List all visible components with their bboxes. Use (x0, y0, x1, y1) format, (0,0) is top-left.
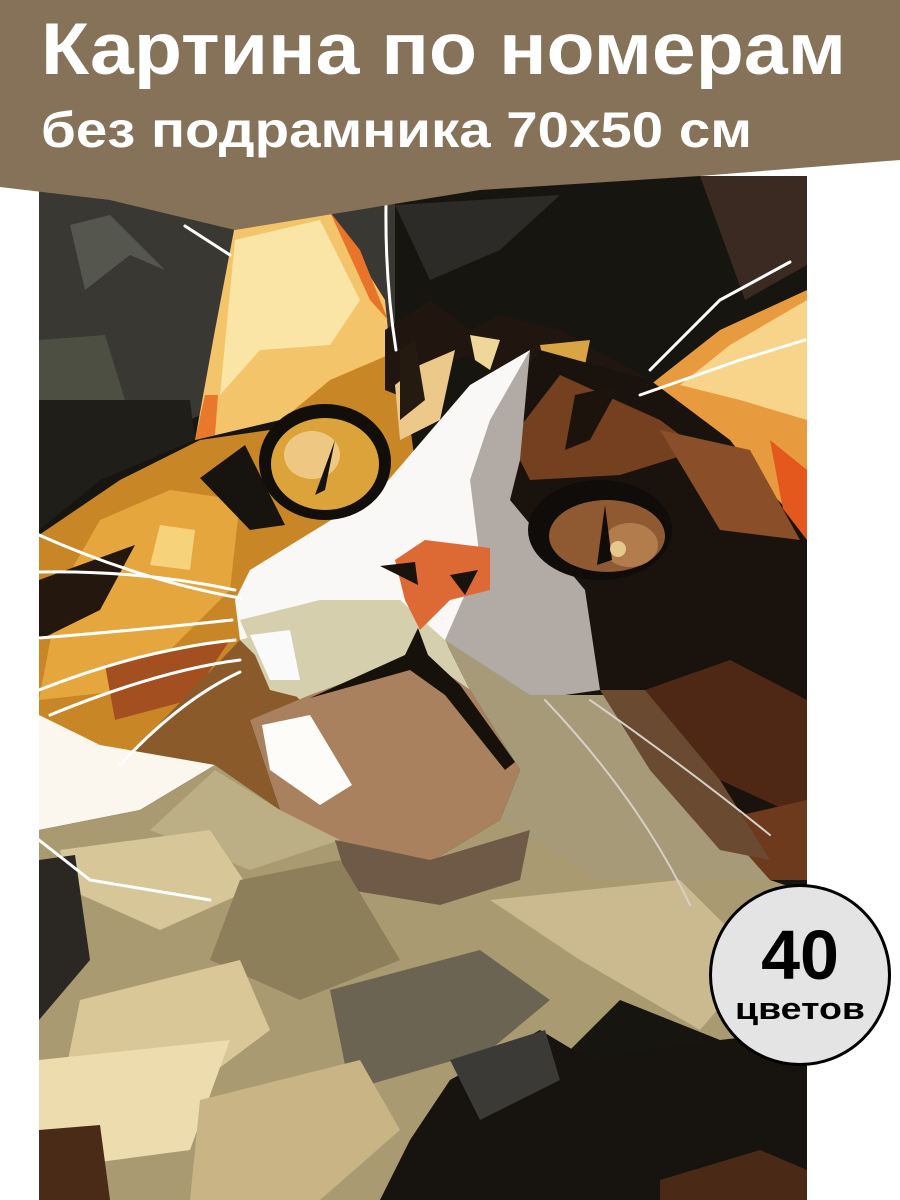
right dark face (541, 350, 807, 545)
upper lip fill (240, 600, 470, 700)
chest fur (39, 765, 800, 1200)
mouth line (310, 628, 515, 770)
white muzzle blaze (235, 350, 530, 646)
lower dark shadow (380, 1030, 744, 1200)
badge: 40 colours (710, 886, 890, 1064)
right ear (653, 290, 807, 504)
nose (395, 540, 490, 630)
forehead dark band (385, 300, 650, 400)
whiskers (39, 205, 805, 905)
painting: cat portrait (39, 176, 807, 1200)
subtitle: без подрамника 70х50 см (41, 102, 752, 158)
left ear (195, 212, 395, 440)
badge: 40 colours: цветов (735, 991, 865, 1026)
left eye (259, 404, 391, 520)
right eye (528, 480, 672, 580)
header banner (0, 0, 900, 230)
left cheek fur (39, 350, 420, 760)
lower cheek shading (135, 640, 300, 810)
lower muzzle fur (250, 670, 520, 860)
left white fur patch (39, 715, 215, 830)
title: Картина по номерам (41, 9, 846, 90)
badge: 40 colours: 40 (761, 916, 839, 994)
background: grey upper left (39, 192, 395, 419)
